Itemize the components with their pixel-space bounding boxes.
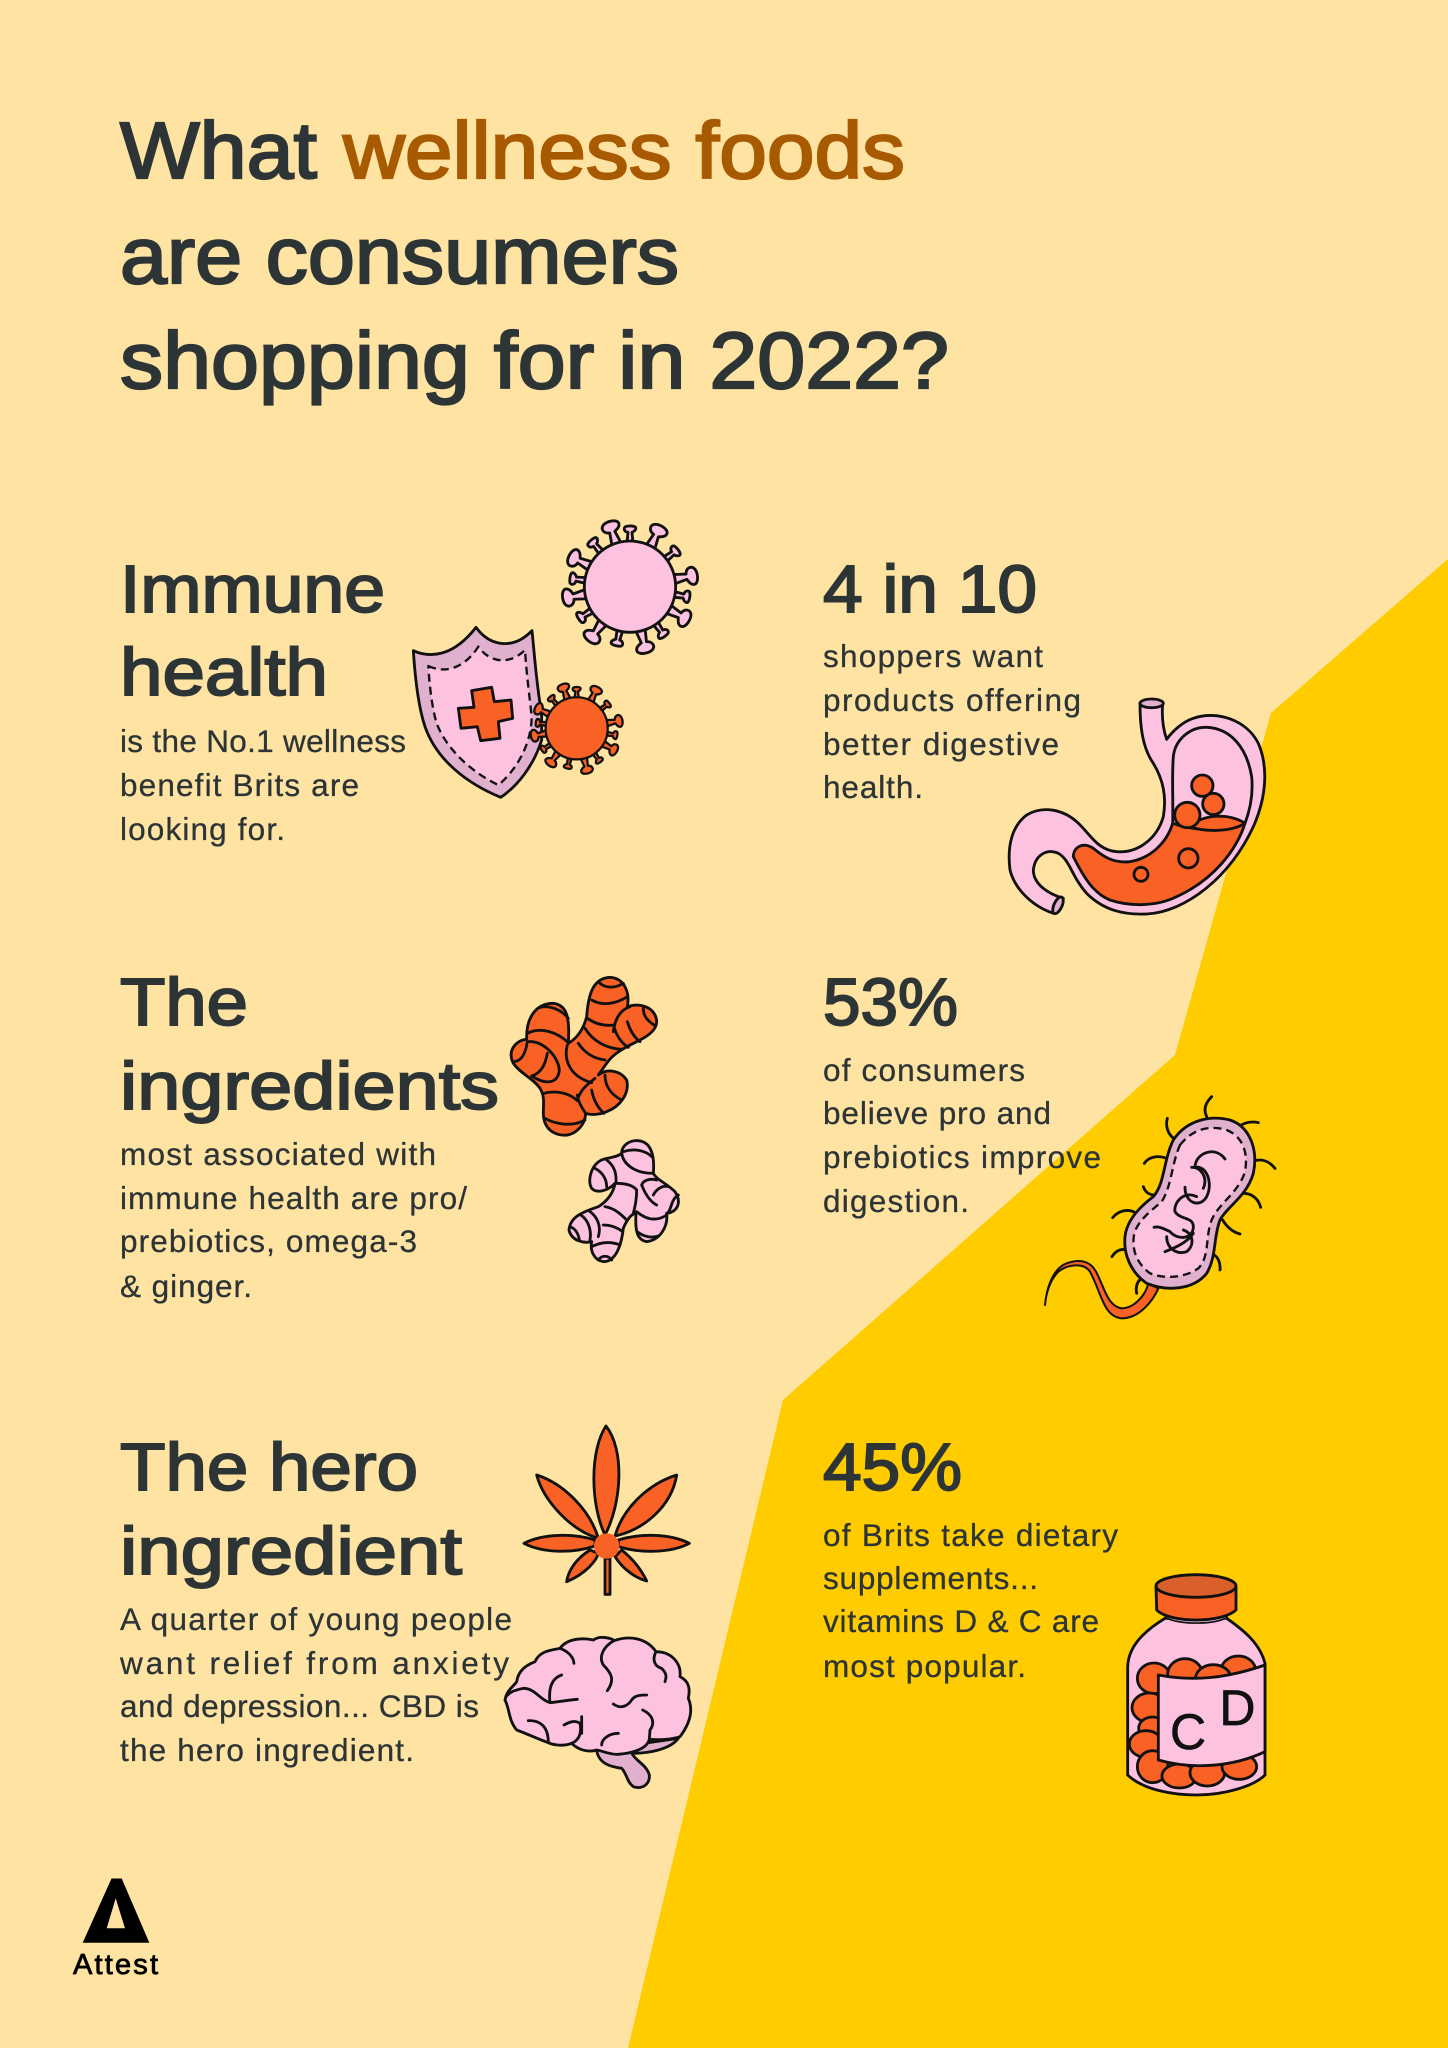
text: dietary supplements: most popular. [823, 1648, 1026, 1684]
text: dietary supplements: vitamins D & C are [823, 1603, 1099, 1639]
cannabis leaf [524, 1426, 689, 1594]
bottle label: D [1219, 1680, 1255, 1736]
text: the ingredients: & ginger. [120, 1268, 252, 1304]
text: dietary supplements: of Brits take dietary [823, 1517, 1118, 1553]
panel: the ingredients [120, 965, 678, 1304]
icon: supplement bottle [1128, 1575, 1265, 1795]
heading: the ingredients: ingredients [120, 1049, 499, 1124]
bottle label: C [1170, 1704, 1206, 1760]
logo wordmark: Attest [73, 1949, 158, 1981]
yellow angular shape [628, 559, 1448, 2048]
text: the hero ingredient: want relief from anxiety [119, 1645, 509, 1681]
text: digestive health: health. [823, 769, 923, 805]
heading: the hero ingredient: The hero [120, 1430, 418, 1505]
title: shopping for in 2022? [120, 316, 949, 405]
pink virus [561, 519, 699, 655]
text: digestive health [823, 638, 1081, 805]
heading: immune health [120, 552, 385, 710]
text: digestive health: better digestive [823, 726, 1059, 762]
text: the hero ingredient: A quarter of young people [120, 1601, 512, 1637]
icon: ginger roots [511, 977, 678, 1262]
text: pro and prebiotics: of consumers [823, 1052, 1025, 1088]
text: the ingredients: prebiotics, omega-3 [120, 1223, 417, 1259]
text: pro and prebiotics: prebiotics improve [823, 1139, 1101, 1175]
heading: the hero ingredient: ingredient [120, 1514, 462, 1589]
icon: stomach [1009, 699, 1265, 915]
panel: digestive health [823, 552, 1265, 915]
icon: shield and viruses [413, 519, 699, 797]
text: dietary supplements: supplements... [823, 1560, 1038, 1596]
panel: pro and prebiotics [823, 965, 1275, 1318]
text: immune health: benefit Brits are [120, 767, 359, 803]
icon: cannabis leaf and brain [505, 1426, 691, 1788]
orange virus [530, 682, 623, 775]
panel: the hero ingredient [119, 1426, 691, 1788]
text: the hero ingredient: the hero ingredient. [120, 1732, 414, 1768]
brain [505, 1637, 691, 1788]
heading: the ingredients [120, 965, 499, 1124]
title: What [120, 106, 317, 195]
orange ginger [511, 977, 657, 1135]
title [120, 106, 949, 405]
heading: the ingredients: The [120, 965, 248, 1040]
text: the ingredients: immune health are pro/ [120, 1180, 467, 1216]
pink ginger [569, 1141, 678, 1262]
panel: immune health [120, 519, 699, 847]
text: digestive health: shoppers want [823, 638, 1043, 674]
title: wellness foods [342, 106, 905, 195]
heading: immune health: health [120, 635, 328, 710]
bottle label [1158, 1665, 1265, 1766]
text: the ingredients [120, 1136, 467, 1304]
stat: 4 in 10: 4 in 10 [823, 552, 1037, 627]
text: the hero ingredient: and depression... CBD is [120, 1688, 479, 1724]
panel: dietary supplements [823, 1430, 1265, 1795]
bottle cap [1156, 1575, 1236, 1620]
heading: the hero ingredient [120, 1430, 462, 1589]
title: are consumers [120, 211, 679, 300]
text: pro and prebiotics [823, 1052, 1101, 1219]
logo: Attest [73, 1878, 158, 1981]
logo triangle [83, 1878, 149, 1943]
text: digestive health: products offering [823, 682, 1081, 718]
stat: 45%: 45% [823, 1430, 962, 1505]
text: pro and prebiotics: believe pro and [823, 1095, 1051, 1131]
heading: immune health: Immune [120, 552, 385, 627]
stat: 53%: 53% [823, 965, 958, 1040]
text: the hero ingredient [119, 1601, 512, 1768]
shield [413, 627, 542, 797]
icon: bacterium [1045, 1097, 1275, 1318]
text: the ingredients: most associated with [120, 1136, 436, 1172]
text: dietary supplements [823, 1517, 1118, 1684]
text: immune health [120, 723, 406, 847]
text: pro and prebiotics: digestion. [823, 1183, 969, 1219]
text: immune health: is the No.1 wellness [120, 723, 406, 759]
text: immune health: looking for. [120, 811, 285, 847]
